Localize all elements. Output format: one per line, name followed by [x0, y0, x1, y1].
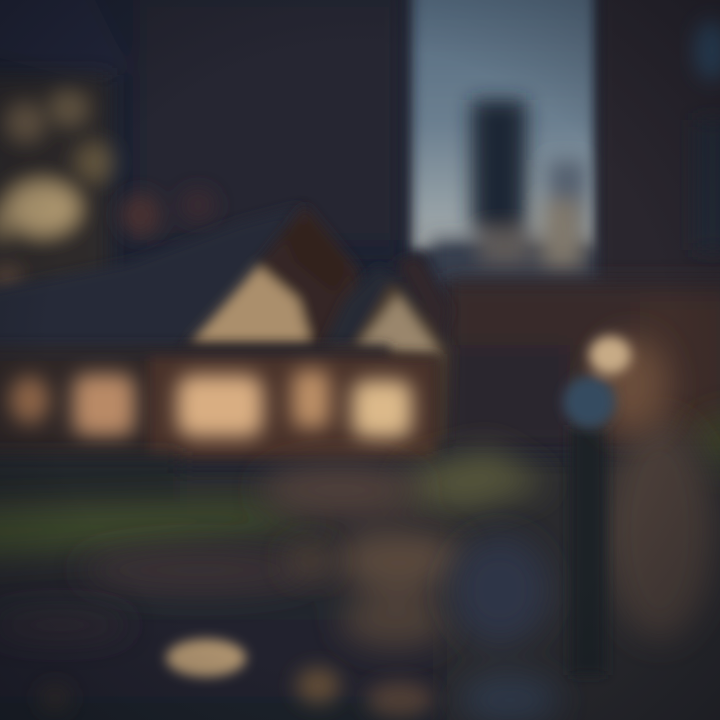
right building window [694, 20, 720, 250]
house: gable wall [180, 205, 372, 352]
ground [0, 455, 720, 720]
path glow under house [80, 420, 715, 648]
brick wall on right [445, 280, 720, 450]
distant tower [430, 100, 600, 285]
red chimney glow [120, 189, 216, 237]
house: small side gable [322, 255, 450, 440]
house: glowing windows [9, 370, 412, 438]
left dark building [0, 0, 405, 270]
street lamp post [570, 425, 606, 675]
reflection: bright puddle [166, 639, 246, 677]
water reflections [0, 535, 560, 720]
reflection: small highlights [39, 668, 434, 718]
house: main roof [0, 205, 305, 358]
left window lights cluster [0, 75, 114, 294]
street lamp head [563, 336, 631, 428]
street lamp halo [596, 337, 668, 433]
right building [600, 0, 720, 280]
house: lower wall [0, 345, 440, 462]
grass strips [0, 410, 720, 558]
sky [410, 0, 595, 250]
